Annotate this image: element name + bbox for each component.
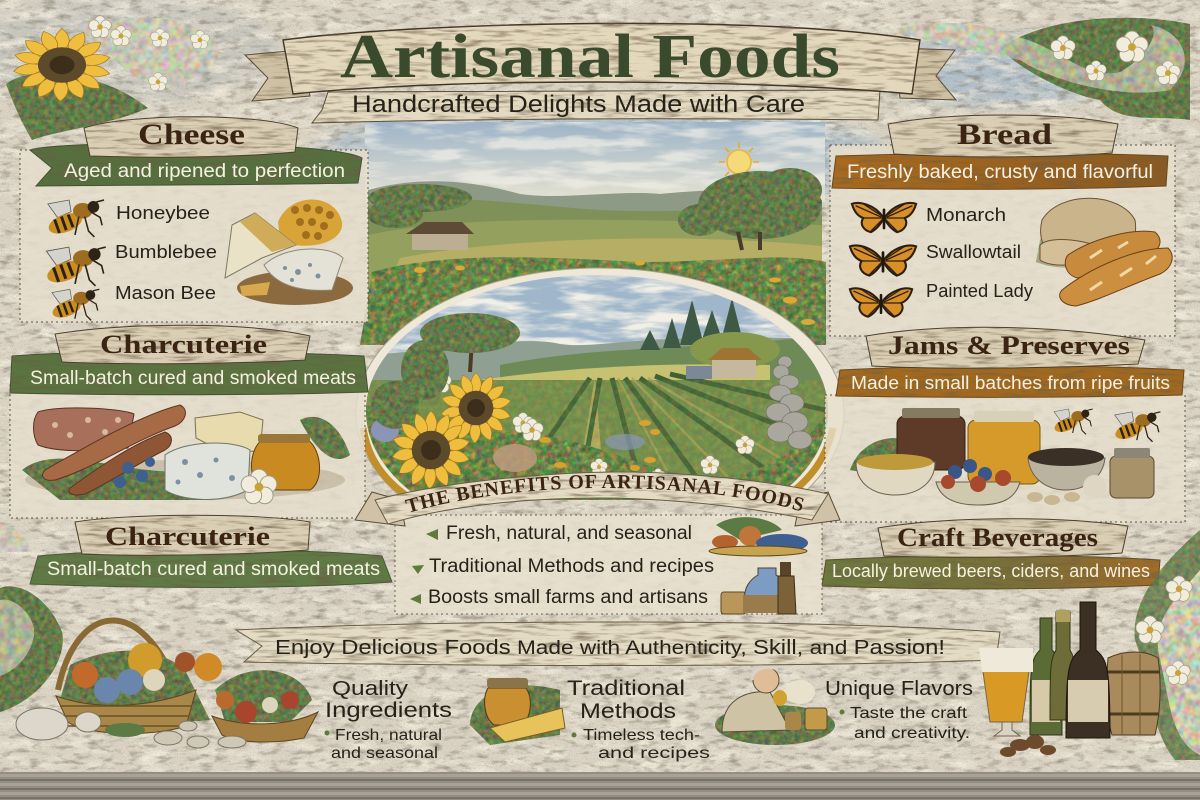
left treeline xyxy=(367,184,472,228)
meadow flowers xyxy=(414,260,815,325)
farmhouse xyxy=(406,222,474,250)
icon: bumblebee xyxy=(44,247,106,287)
foxglove spike xyxy=(766,356,812,449)
panel: jams and preserves xyxy=(825,327,1185,522)
panel: benefits xyxy=(354,472,841,614)
footer tagline: Enjoy Delicious Foods Made with Authenticity, Skill, and Passion! xyxy=(275,637,945,659)
foreground flowers xyxy=(366,405,825,500)
bottle: red wine xyxy=(1066,602,1110,738)
barrel xyxy=(1106,652,1160,735)
heading: Charcuterie xyxy=(100,330,267,359)
column: quality ingredients xyxy=(324,678,452,762)
icon: mason bee xyxy=(50,289,99,321)
panel: bread xyxy=(830,115,1175,336)
jam illustration xyxy=(850,408,1160,505)
main plaque xyxy=(283,23,920,94)
icon: honeybee xyxy=(46,200,104,237)
oval vignette xyxy=(356,268,844,500)
heading: Cheese xyxy=(138,118,245,151)
column: traditional methods: Traditional xyxy=(567,677,685,700)
column: unique flavors xyxy=(825,678,973,742)
heading: Charcuterie xyxy=(105,522,270,551)
bread illustration xyxy=(1036,198,1172,306)
bullet: traditional: Traditional Methods and recipes xyxy=(429,556,714,577)
green ribbon xyxy=(30,143,362,186)
icon: jar and cheese xyxy=(470,678,565,745)
oval tree xyxy=(371,313,520,429)
icon: sunflower xyxy=(12,29,111,101)
heading plaque xyxy=(866,327,1145,368)
title banner xyxy=(245,23,956,123)
column: traditional methods: Timeless tech- xyxy=(583,727,700,744)
tagline: Made in small batches from ripe fruits xyxy=(851,373,1170,393)
banner tails xyxy=(245,48,956,101)
subtitle: Handcrafted Delights Made with Care xyxy=(352,91,805,118)
panel: craft beverages xyxy=(822,519,1160,589)
bottle: wine left xyxy=(1030,618,1062,735)
beverages illustration xyxy=(979,602,1160,757)
cheese board illustration xyxy=(225,200,353,305)
column: quality ingredients: and seasonal xyxy=(331,745,438,762)
label: painted lady: Painted Lady xyxy=(926,281,1033,301)
icon: sun xyxy=(719,142,759,182)
icon: artisan xyxy=(715,667,835,745)
icon: painted lady xyxy=(850,288,912,317)
bullet: boosts: Boosts small farms and artisans xyxy=(428,587,708,608)
label: swallowtail: Swallowtail xyxy=(926,242,1021,262)
charcuterie illustration xyxy=(22,405,350,504)
heading plaque xyxy=(84,117,298,157)
heading plaque xyxy=(888,115,1118,157)
heading plaque xyxy=(878,519,1128,557)
corner floral: top right xyxy=(890,18,1190,120)
label: honeybee: Honeybee xyxy=(116,203,210,223)
corner floral: right edge xyxy=(1135,530,1200,760)
basket illustration xyxy=(16,621,318,748)
field rows xyxy=(366,372,828,492)
title: Artisanal Foods xyxy=(340,23,840,91)
beer glass xyxy=(979,648,1033,736)
subtitle plaque xyxy=(312,90,880,123)
label: bumblebee: Bumblebee xyxy=(115,242,217,262)
heading: Craft Beverages xyxy=(897,523,1098,552)
heading plaque xyxy=(75,515,310,555)
panel: charcuterie second xyxy=(30,515,392,588)
brown ribbon xyxy=(836,366,1184,397)
heading plaque xyxy=(55,325,310,364)
nuts xyxy=(1000,735,1056,757)
bottom stripe border xyxy=(0,772,1200,800)
column: quality ingredients: Quality xyxy=(332,678,408,700)
tagline: Small-batch cured and smoked meats xyxy=(47,559,380,580)
panel: charcuterie xyxy=(10,325,368,518)
panel: cheese xyxy=(20,117,368,322)
column: traditional methods xyxy=(567,677,710,762)
tagline: Freshly baked, crusty and flavorful xyxy=(847,162,1153,183)
icon: swallowtail xyxy=(850,245,916,276)
column: quality ingredients: Ingredients xyxy=(325,699,452,722)
icon: sunflowers xyxy=(391,373,512,489)
column: unique flavors: and creativity. xyxy=(854,725,970,742)
column: quality ingredients: Fresh, natural xyxy=(335,727,442,744)
conifers xyxy=(640,298,744,350)
column: traditional methods: Methods xyxy=(580,700,676,723)
heading: Bread xyxy=(957,118,1052,151)
green ribbon xyxy=(10,351,368,395)
bottle: wine middle xyxy=(1050,612,1076,720)
ribbon tails xyxy=(355,492,840,526)
heading: Jams & Preserves xyxy=(888,331,1130,360)
green ribbon xyxy=(30,550,392,588)
benefits heading: THE BENEFITS OF ARTISANAL FOODS xyxy=(404,474,804,512)
icon: monarch xyxy=(852,203,916,232)
label: mason bee: Mason Bee xyxy=(115,283,216,303)
corner floral: top left xyxy=(6,16,219,140)
footer banner xyxy=(236,622,1000,666)
landscape scene xyxy=(360,122,826,345)
column: unique flavors: Taste the craft xyxy=(850,705,968,722)
tagline: Aged and ripened to perfection xyxy=(64,161,345,182)
ribbon xyxy=(822,556,1160,589)
right tree xyxy=(678,168,822,239)
icon: fruit plate xyxy=(709,517,808,556)
tagline: Small-batch cured and smoked meats xyxy=(30,368,356,389)
orange ribbon xyxy=(832,153,1168,189)
icon: bottles and jar xyxy=(721,562,796,614)
tagline: Locally brewed beers, ciders, and wines xyxy=(832,561,1150,581)
label: monarch: Monarch xyxy=(926,205,1006,225)
benefits ribbon xyxy=(375,472,828,524)
cottage xyxy=(686,348,762,379)
column: unique flavors: Unique Flavors xyxy=(825,678,973,700)
bullet: fresh: Fresh, natural, and seasonal xyxy=(446,523,692,544)
column: traditional methods: and recipes xyxy=(598,745,710,762)
left floral border xyxy=(0,524,63,712)
